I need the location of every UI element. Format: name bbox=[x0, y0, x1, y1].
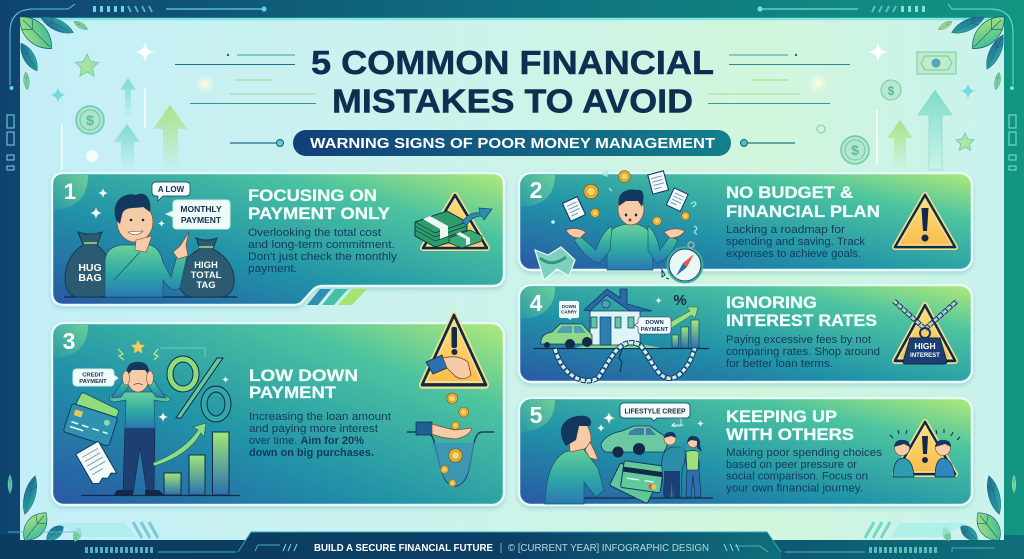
body text: Paying excessive fees by not bbox=[726, 334, 871, 346]
speech bubble: down carry: DOWN bbox=[562, 304, 576, 309]
illustration: man with bags: BAG bbox=[78, 272, 102, 284]
body text bbox=[726, 447, 883, 494]
body text: over time. Aim for 20% bbox=[249, 435, 364, 447]
number badge 1 bbox=[54, 175, 88, 210]
body text: Don't just check the monthly bbox=[248, 251, 398, 263]
body text: Lacking a roadmap for bbox=[726, 224, 845, 236]
body text bbox=[249, 411, 391, 459]
background decorations right: $ bbox=[888, 84, 895, 98]
body text: based on peer pressure or bbox=[726, 459, 857, 471]
panel: card 1 focusing on payment only bbox=[52, 173, 504, 305]
body text: and long-term commitment. bbox=[248, 239, 395, 251]
heading bbox=[726, 407, 854, 444]
number badge 1: 1 bbox=[64, 179, 76, 204]
background decorations right: $ bbox=[851, 142, 859, 158]
icon: warning with two worried people bbox=[890, 422, 960, 477]
speech bubble: a low bbox=[152, 182, 190, 201]
panel: card 5 keeping up with others bbox=[519, 398, 972, 505]
illustration: confused man with papers and coins bbox=[535, 171, 702, 282]
subtitle pill: WARNING SIGNS OF POOR MONEY MANAGEMENT bbox=[310, 136, 715, 152]
speech bubble: down payment bbox=[634, 317, 671, 334]
body text bbox=[726, 224, 866, 260]
background decorations left: $ bbox=[86, 112, 94, 128]
illustration: man with bags bbox=[64, 188, 237, 297]
body text: comparing rates. Shop around bbox=[726, 346, 880, 358]
body text: payment. bbox=[248, 263, 297, 275]
icon: coins falling into a pit bbox=[407, 391, 494, 487]
number badge 3: 3 bbox=[63, 328, 75, 354]
body text bbox=[248, 227, 398, 275]
icon: warning with chained weight bbox=[894, 301, 957, 364]
heading: KEEPING UP bbox=[726, 407, 837, 426]
illustration: house car and chain: % bbox=[673, 292, 687, 309]
number badge 3 bbox=[54, 325, 88, 358]
body text bbox=[726, 334, 880, 370]
corner leaves top right bbox=[937, 9, 1012, 90]
body text: Increasing the loan amount bbox=[249, 411, 391, 423]
corner leaves top left bbox=[12, 9, 89, 90]
footer bar bbox=[8, 532, 995, 559]
heading bbox=[248, 186, 391, 223]
illustration: stressed man with percent and bars bbox=[63, 340, 240, 496]
number badge 2 bbox=[521, 175, 555, 207]
illustration: man with bags: HUG bbox=[78, 262, 102, 274]
speech bubble: credit payment: PAYMENT bbox=[79, 379, 107, 385]
body text: Making poor spending choices bbox=[726, 447, 883, 459]
body text: Overlooking the total cost bbox=[248, 227, 381, 239]
icon: warning with chained weight: HIGH bbox=[914, 341, 936, 351]
title bbox=[311, 44, 714, 120]
icon: warning triangle bbox=[895, 195, 955, 247]
speech bubble: monthly payment: MONTHLY bbox=[180, 204, 222, 214]
speech bubble: down carry: CARRY bbox=[561, 310, 577, 314]
speech bubble: lifestyle creep: LIFESTYLE CREEP bbox=[624, 406, 686, 416]
heading: FOCUSING ON bbox=[248, 186, 377, 205]
speech bubble: down payment: PAYMENT bbox=[641, 327, 669, 333]
illustration: man with bags: TOTAL bbox=[191, 270, 222, 281]
title: 5 COMMON FINANCIAL bbox=[311, 44, 714, 81]
illustration: man with bags: TAG bbox=[196, 280, 216, 291]
heading: PAYMENT ONLY bbox=[248, 204, 391, 223]
number badge 5: 5 bbox=[530, 402, 543, 428]
illustration: man with bags: HIGH bbox=[194, 260, 218, 271]
heading: WITH OTHERS bbox=[726, 425, 854, 444]
speech bubble: a low: A LOW bbox=[158, 185, 185, 194]
number badge 5 bbox=[521, 400, 555, 432]
illustration: man watching car and couple bbox=[545, 412, 713, 505]
heading bbox=[726, 183, 880, 221]
body text: social comparison. Focus on bbox=[726, 470, 868, 482]
speech bubble: credit payment bbox=[73, 369, 118, 386]
illustration: house car and chain bbox=[534, 289, 709, 381]
footer bar: BUILD A SECURE FINANCIAL FUTURE bbox=[314, 543, 493, 554]
footer bar: © [CURRENT YEAR] INFOGRAPHIC DESIGN bbox=[508, 543, 709, 554]
body text: expenses to achieve goals. bbox=[726, 248, 861, 260]
speech bubble: monthly payment: PAYMENT bbox=[181, 215, 222, 225]
body text: for better loan terms. bbox=[726, 358, 833, 370]
corner leaves bottom left bbox=[8, 474, 158, 546]
heading bbox=[249, 366, 358, 402]
icon: warning with cash and arrow bbox=[415, 195, 492, 248]
heading: NO BUDGET & bbox=[726, 183, 853, 202]
body text: down on big purchases. bbox=[249, 447, 374, 459]
subtitle pill bbox=[293, 130, 731, 156]
number badge 4: 4 bbox=[530, 290, 543, 316]
heading: FINANCIAL PLAN bbox=[726, 202, 880, 221]
title: MISTAKES TO AVOID bbox=[332, 82, 693, 120]
background decorations left bbox=[50, 42, 316, 170]
speech bubble: down carry bbox=[559, 301, 579, 320]
heading bbox=[726, 293, 877, 330]
heading: INTEREST RATES bbox=[726, 311, 877, 330]
icon: warning with hand dropping coins bbox=[422, 315, 486, 385]
panel: card 3 low down payment bbox=[52, 315, 504, 505]
panel: card 4 ignoring interest rates bbox=[519, 285, 972, 382]
panel: card 2 no budget and financial plan bbox=[519, 171, 972, 282]
number badge 2: 2 bbox=[530, 177, 542, 203]
heading: IGNORING bbox=[726, 293, 817, 312]
speech bubble: monthly payment bbox=[166, 200, 230, 229]
speech bubble: lifestyle creep bbox=[620, 403, 690, 421]
corner leaves bottom right bbox=[865, 474, 1016, 546]
number badge 4 bbox=[521, 287, 555, 319]
body text: spending and saving. Track bbox=[726, 236, 866, 248]
body text: your own financial journey. bbox=[726, 482, 863, 494]
speech bubble: down payment: DOWN bbox=[645, 320, 664, 326]
heading: LOW DOWN bbox=[249, 366, 358, 385]
icon: warning with chained weight: INTEREST bbox=[910, 353, 940, 359]
body text: and paying more interest bbox=[249, 423, 378, 435]
background decorations right bbox=[708, 42, 976, 170]
heading: PAYMENT bbox=[249, 383, 337, 402]
speech bubble: credit payment: CREDIT bbox=[82, 372, 104, 378]
